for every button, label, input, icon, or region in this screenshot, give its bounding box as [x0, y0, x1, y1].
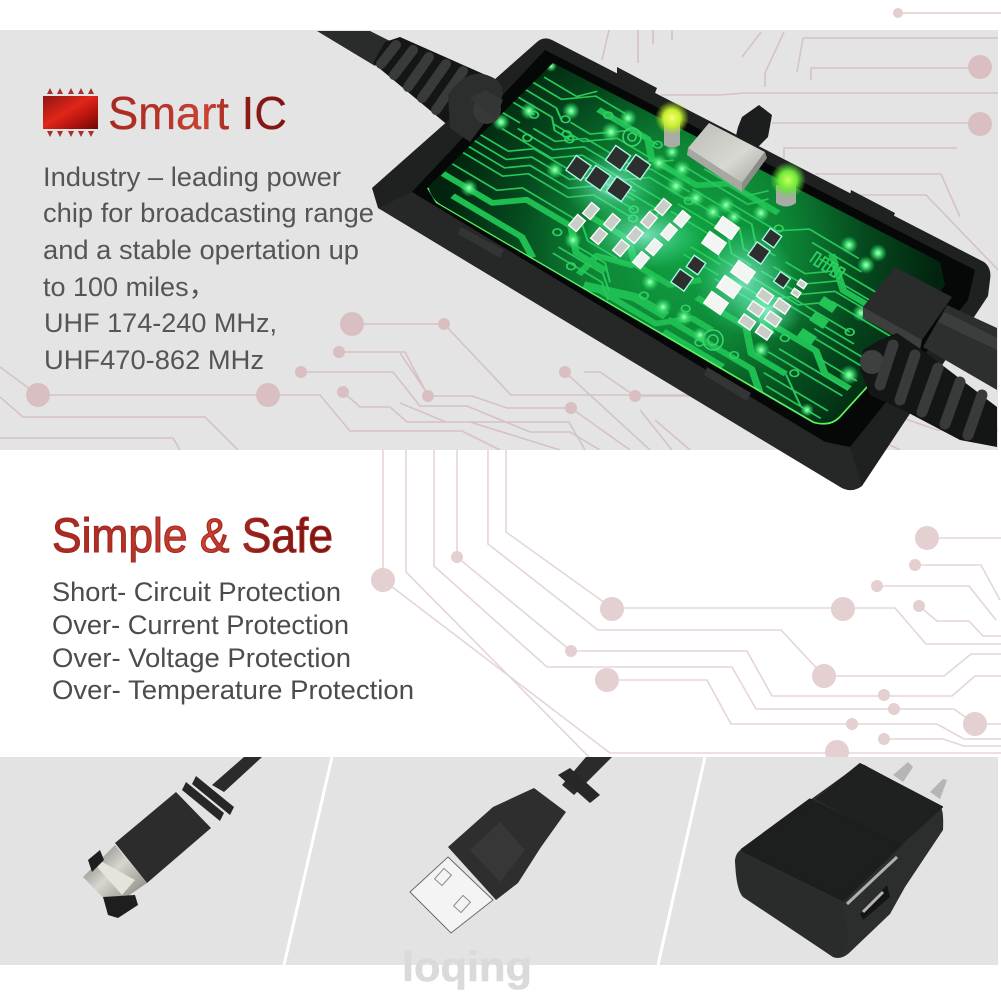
- icon: red IC chip: [43, 88, 98, 137]
- circuit traces: grey panel: [0, 30, 1001, 450]
- contact pads: [797, 296, 838, 345]
- light SMD resistors: [569, 198, 807, 340]
- text block: smart IC description: to 100 miles，: [43, 272, 216, 302]
- LED: green indicator: [770, 162, 806, 206]
- power switch: [687, 105, 772, 192]
- LED: yellow indicator: [655, 101, 689, 148]
- panel: top white strip trace: [893, 8, 1001, 18]
- bright lower edge: [427, 188, 870, 425]
- illustration: USB wall charger: [735, 762, 947, 958]
- text block: smart IC description: Industry – leading power: [43, 162, 341, 192]
- circuit traces: white panel: [371, 450, 1001, 764]
- concentric via marks: [623, 128, 723, 350]
- heading: Smart IC: Smart IC: [108, 87, 287, 139]
- panel: smart IC grey background: [0, 30, 998, 450]
- divider slashes: [284, 757, 705, 965]
- text block: smart IC description: [43, 162, 374, 375]
- text block: smart IC description: UHF470-862 MHz: [44, 345, 264, 375]
- via glows: [460, 60, 887, 417]
- illustration: top-left cable stub: [448, 74, 503, 142]
- illustration: bottom-right plug and cables: [860, 267, 997, 447]
- panel: accessories grey background: [0, 757, 998, 965]
- text block: protections list: [52, 577, 414, 705]
- text block: protections list: Over- Voltage Protection: [52, 643, 351, 673]
- illustration: black enclosure with circuit board: [372, 38, 990, 490]
- pcb board: [424, 60, 945, 425]
- text block: smart IC description: chip for broadcasting range: [43, 198, 374, 228]
- text block: protections list: Over- Temperature Protection: [52, 675, 414, 705]
- watermark: loqing: loqing: [402, 943, 532, 990]
- illustration: USB-A plug: [410, 757, 612, 933]
- dark SMD chips: [566, 145, 790, 291]
- text block: protections list: Short- Circuit Protection: [52, 577, 341, 607]
- illustration: top-left cable and strain relief: [317, 31, 505, 140]
- serpentine trace: [810, 252, 845, 280]
- chip glows: [562, 150, 803, 340]
- text block: smart IC description: UHF 174-240 MHz,: [44, 308, 277, 338]
- text block: protections list: Over- Current Protection: [52, 610, 349, 640]
- text block: smart IC description: and a stable opertation up: [43, 235, 359, 265]
- heading: Simple & Safe: Simple & Safe: [52, 510, 333, 563]
- enclosure clips: [617, 67, 895, 223]
- circuit nodes: grey panel: [26, 55, 992, 414]
- illustration: F-type connector cable: [83, 757, 262, 918]
